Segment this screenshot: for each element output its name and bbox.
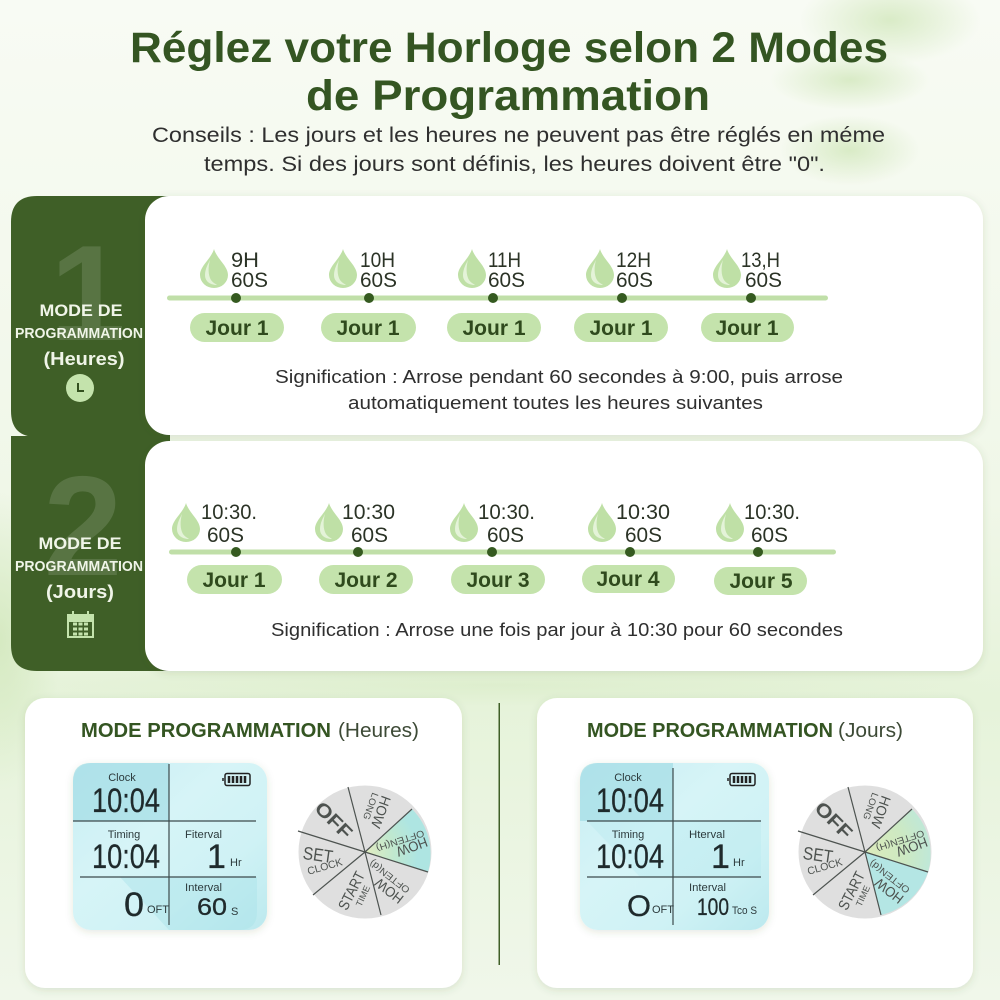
timeline: mode 2: 60S (351, 524, 388, 547)
LCD screen: jours: O (627, 890, 651, 923)
dial: heures: LONG (360, 791, 380, 821)
LCD screen: heures: Hr (230, 857, 242, 869)
card: mode 1 (145, 196, 983, 435)
icon: battery (728, 774, 755, 786)
icon: battery (223, 774, 250, 786)
dial: jours: OFTEN(H) (875, 827, 925, 853)
timeline: mode 2: 60S (207, 524, 244, 547)
LCD screen: jours: Clock (614, 772, 642, 784)
dial: heures: HOW (371, 874, 407, 907)
meaning text: mode 1: automatiquement toutes les heures suivantes (348, 392, 763, 413)
dial: jours: START (835, 869, 869, 913)
dial: jours: TIME (854, 884, 872, 908)
heading: heures: (Heures) (338, 720, 419, 742)
timeline: mode 1 (167, 249, 828, 342)
timeline: mode 1: Jour 1 (589, 317, 653, 340)
sidebar: mode 1: (Heures) (44, 349, 124, 369)
dial: heures: START (335, 869, 369, 913)
panel: programmation jours (537, 698, 973, 988)
dial: jours (798, 786, 932, 918)
tips text: temps. Si des jours sont définis, les heures doivent être "0". (204, 152, 825, 176)
timeline: mode 2: 60S (487, 524, 524, 547)
timeline: mode 1: 11H (488, 249, 521, 272)
LCD screen: jours: 10:04 (596, 782, 664, 820)
panel: programmation heures (25, 698, 462, 988)
dial: jours: HOW (894, 834, 930, 860)
sidebar: mode 2: PROGRAMMATION (15, 559, 143, 575)
meaning text: mode 1 (275, 366, 843, 413)
LCD screen: heures: Clock (108, 772, 136, 784)
dial: jours: HOW (868, 794, 894, 831)
LCD screen: heures: Fiterval (185, 829, 222, 841)
timeline: mode 1: 60S (360, 269, 397, 292)
tips text (152, 123, 885, 176)
timeline: mode 2: 10:30 (616, 501, 670, 524)
meaning text: mode 2: Signification : Arrose une fois par jour à 10:30 pour 60 secondes (271, 619, 843, 640)
dial: jours: CLOCK (806, 856, 844, 878)
LCD screen: jours: Hterval (689, 829, 725, 841)
timeline: mode 2: 60S (751, 524, 788, 547)
timeline: mode 1: Jour 1 (336, 317, 400, 340)
timeline: mode 2: Jour 5 (729, 570, 793, 593)
LCD screen: heures (73, 763, 267, 930)
dial: jours: HOW (871, 874, 907, 907)
title: Réglez votre Horloge selon 2 Modes (130, 24, 888, 72)
timeline: mode 1: 9H (231, 249, 259, 272)
LCD screen: heures: 10:04 (92, 782, 160, 820)
dial: heures: TIME (354, 884, 372, 908)
dial: heures: SET (302, 843, 334, 867)
timeline: mode 2: 60S (625, 524, 662, 547)
LCD screen: heures: 10:04 (92, 838, 160, 876)
panel: mode 2 (jours) (11, 436, 983, 671)
sidebar: mode 1: PROGRAMMATION (15, 326, 143, 342)
timeline: mode 1: 60S (745, 269, 782, 292)
sidebar: mode 2 (11, 436, 170, 671)
LCD screen: jours: OFT (652, 904, 674, 916)
LCD screen: heures: Interval (185, 882, 222, 894)
divider (498, 703, 500, 965)
heading: jours: MODE PROGRAMMATION (587, 720, 833, 742)
LCD screen: jours: Timing (612, 829, 644, 841)
dial: jours: OFTEN(d) (868, 857, 912, 895)
panel: mode 1 (heures) (11, 196, 983, 437)
LCD screen: jours: Interval (689, 882, 726, 894)
timeline: mode 2: Jour 4 (596, 568, 660, 591)
sidebar: mode 2: MODE DE (38, 534, 122, 553)
sidebar: mode 2: 2 (44, 447, 122, 606)
dial: heures: HOW (368, 794, 394, 831)
timeline: mode 2: Jour 1 (202, 569, 266, 592)
heading: heures: MODE PROGRAMMATION (81, 720, 331, 742)
timeline: mode 2: 10:30 (342, 501, 395, 524)
dial: heures: OFF (310, 798, 356, 844)
dial: heures (298, 786, 432, 918)
LCD screen: jours: 1 (711, 838, 730, 876)
title: de Programmation (306, 72, 710, 120)
timeline: mode 2: 10:30. (201, 501, 257, 524)
LCD screen: jours: 100 (697, 894, 729, 921)
timeline: mode 1: 60S (616, 269, 653, 292)
card: mode 2 (145, 441, 983, 671)
timeline: mode 2 (169, 501, 836, 595)
LCD screen: heures: S (231, 906, 238, 918)
dial: heures: OFTEN(d) (368, 857, 412, 895)
timeline: mode 1: Jour 1 (462, 317, 526, 340)
meaning text: mode 1: Signification : Arrose pendant 60 secondes à 9:00, puis arrose (275, 366, 843, 387)
timeline: mode 1: 12H (616, 249, 651, 272)
sidebar: mode 2: (Jours) (46, 582, 114, 602)
LCD screen: heures: OFT (147, 904, 169, 916)
heading: jours: (Jours) (838, 720, 903, 742)
dial: heures: CLOCK (306, 856, 344, 878)
LCD screen: heures: 60 (197, 894, 227, 921)
dial: heures: HOW (394, 834, 430, 860)
LCD screen: jours (580, 763, 769, 930)
dial: jours: SET (802, 843, 834, 867)
title (130, 24, 888, 120)
LCD screen: jours: Hr (733, 857, 745, 869)
timeline: mode 2: 10:30. (478, 501, 535, 524)
dial: heures: OFTEN(H) (375, 827, 425, 853)
timeline: mode 1: 10H (360, 249, 395, 272)
sidebar: mode 1: MODE DE (40, 301, 123, 320)
timeline: mode 2: 10:30. (744, 501, 800, 524)
LCD screen: jours: 10:04 (596, 838, 664, 876)
tips text: Conseils : Les jours et les heures ne peuvent pas être réglés en méme (152, 123, 885, 147)
timeline: mode 1: 60S (488, 269, 525, 292)
dial: jours: LONG (860, 791, 880, 821)
timeline: mode 1: Jour 1 (715, 317, 779, 340)
sidebar: mode 1 (11, 196, 170, 437)
timeline: mode 1: 60S (231, 269, 268, 292)
timeline: mode 2: Jour 2 (334, 569, 398, 592)
LCD screen: heures: 0 (124, 886, 144, 924)
LCD screen: heures: 1 (207, 838, 226, 876)
timeline: mode 2: Jour 3 (466, 569, 530, 592)
timeline: mode 1: 13,H (741, 249, 780, 272)
sidebar: mode 1: 1 (50, 217, 126, 369)
dial: jours: OFF (810, 798, 856, 844)
LCD screen: heures: Timing (108, 829, 140, 841)
timeline: mode 1: Jour 1 (205, 317, 269, 340)
LCD screen: jours: Tco S (732, 905, 757, 917)
